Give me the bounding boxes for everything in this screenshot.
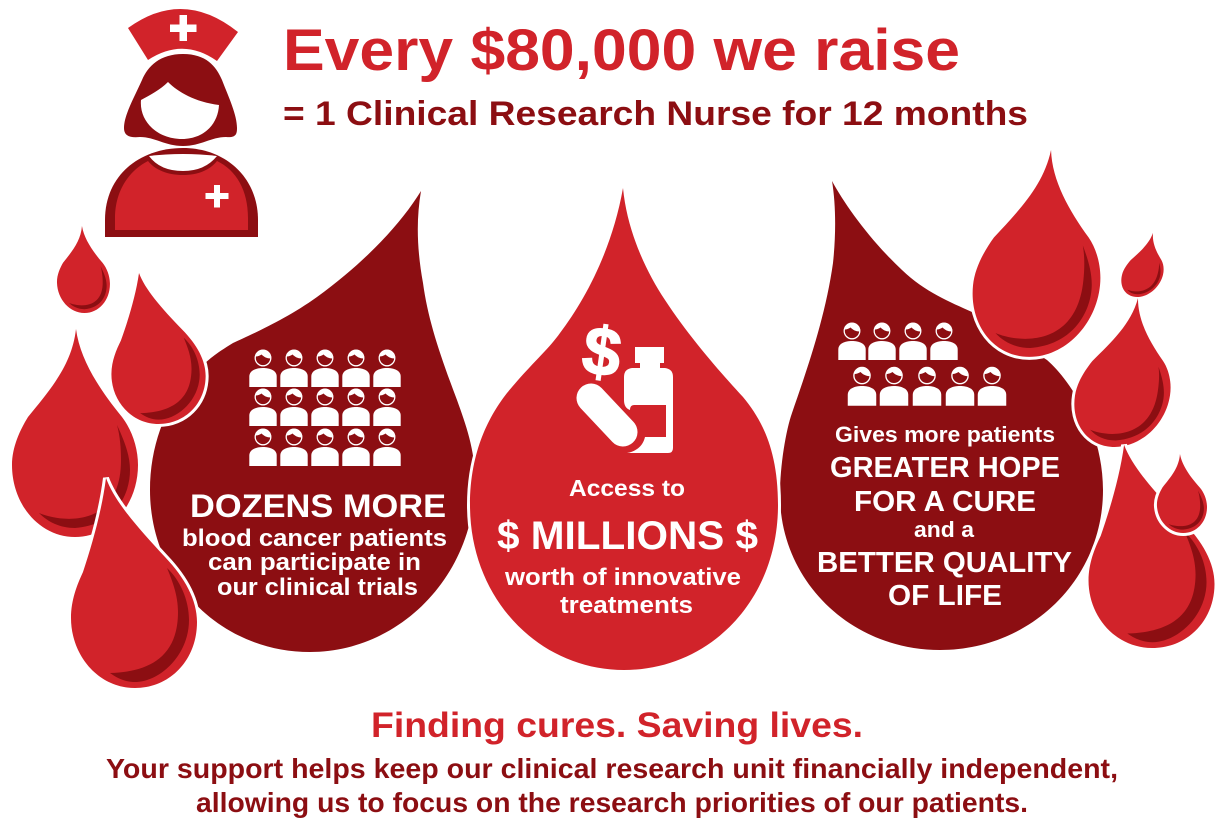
central drop text: treatments bbox=[560, 592, 693, 619]
drop outline top bbox=[966, 150, 1114, 357]
right drop text bbox=[817, 422, 1072, 612]
left drop text bbox=[182, 488, 447, 601]
central drop bbox=[470, 188, 778, 670]
left drop text: DOZENS MORE bbox=[190, 488, 446, 524]
right drop text: Gives more patients bbox=[835, 422, 1055, 447]
nurse face bbox=[141, 82, 219, 139]
left drop text: blood cancer patients bbox=[182, 525, 447, 552]
drop outline lower bbox=[71, 478, 197, 688]
nurse hair bbox=[124, 54, 237, 146]
nurse collar bbox=[149, 154, 217, 171]
panel: better hope bbox=[780, 181, 1103, 650]
drop mid bbox=[111, 273, 207, 424]
drop large bbox=[12, 329, 138, 537]
drop small bbox=[1155, 454, 1208, 533]
panel: dozens more patients bbox=[150, 191, 475, 652]
dark drop right bbox=[780, 181, 1103, 650]
bottle bbox=[624, 347, 673, 453]
drop outline bottom bbox=[1088, 445, 1215, 648]
subtitle: = 1 Clinical Research Nurse for 12 months bbox=[283, 95, 1028, 133]
left drop text: can participate in bbox=[208, 549, 421, 576]
dark drop left bbox=[150, 191, 475, 652]
panel: access to millions bbox=[470, 188, 778, 670]
drop lower bbox=[71, 478, 197, 688]
closing text: Your support helps keep our clinical research unit financially independent, bbox=[106, 753, 1118, 784]
drop top bbox=[966, 150, 1114, 357]
cap cross bbox=[170, 15, 196, 41]
right drop text: BETTER QUALITY bbox=[817, 547, 1072, 579]
capsule bbox=[591, 398, 623, 432]
drop outline small bbox=[1155, 454, 1208, 533]
patient icons rows bbox=[838, 323, 1006, 406]
patient icons grid bbox=[249, 350, 401, 466]
central drop text: $ MILLIONS $ bbox=[497, 514, 758, 558]
drop outline mid bbox=[111, 273, 207, 424]
icon: money and medicine bbox=[578, 312, 673, 453]
drop tiny bbox=[1117, 233, 1173, 297]
nurse cap bbox=[128, 9, 238, 61]
uniform cross bbox=[206, 185, 228, 208]
droplets right bbox=[966, 150, 1215, 648]
tagline: Finding cures. Saving lives. bbox=[371, 706, 863, 745]
title: Every $80,000 we raise bbox=[283, 18, 960, 83]
drop middle bbox=[1067, 298, 1185, 447]
right drop text: FOR A CURE bbox=[854, 486, 1036, 518]
nurse uniform bbox=[115, 161, 248, 230]
closing text bbox=[106, 753, 1118, 818]
nurse body bbox=[105, 148, 258, 237]
closing text: allowing us to focus on the research priorities of our patients. bbox=[196, 787, 1028, 818]
central drop text: Access to bbox=[569, 475, 685, 501]
dollar sign: $ bbox=[578, 312, 626, 392]
central drop text bbox=[497, 475, 758, 619]
nurse icon bbox=[105, 9, 258, 237]
right drop text: GREATER HOPE bbox=[830, 452, 1060, 484]
central drop text: worth of innovative bbox=[504, 564, 741, 591]
drop small top bbox=[55, 226, 111, 313]
drop outline middle bbox=[1067, 298, 1185, 447]
droplets left bbox=[12, 226, 207, 688]
left drop text: our clinical trials bbox=[217, 574, 418, 601]
right drop text: OF LIFE bbox=[888, 580, 1002, 612]
right drop text: and a bbox=[914, 517, 975, 542]
drop bottom bbox=[1088, 445, 1215, 648]
